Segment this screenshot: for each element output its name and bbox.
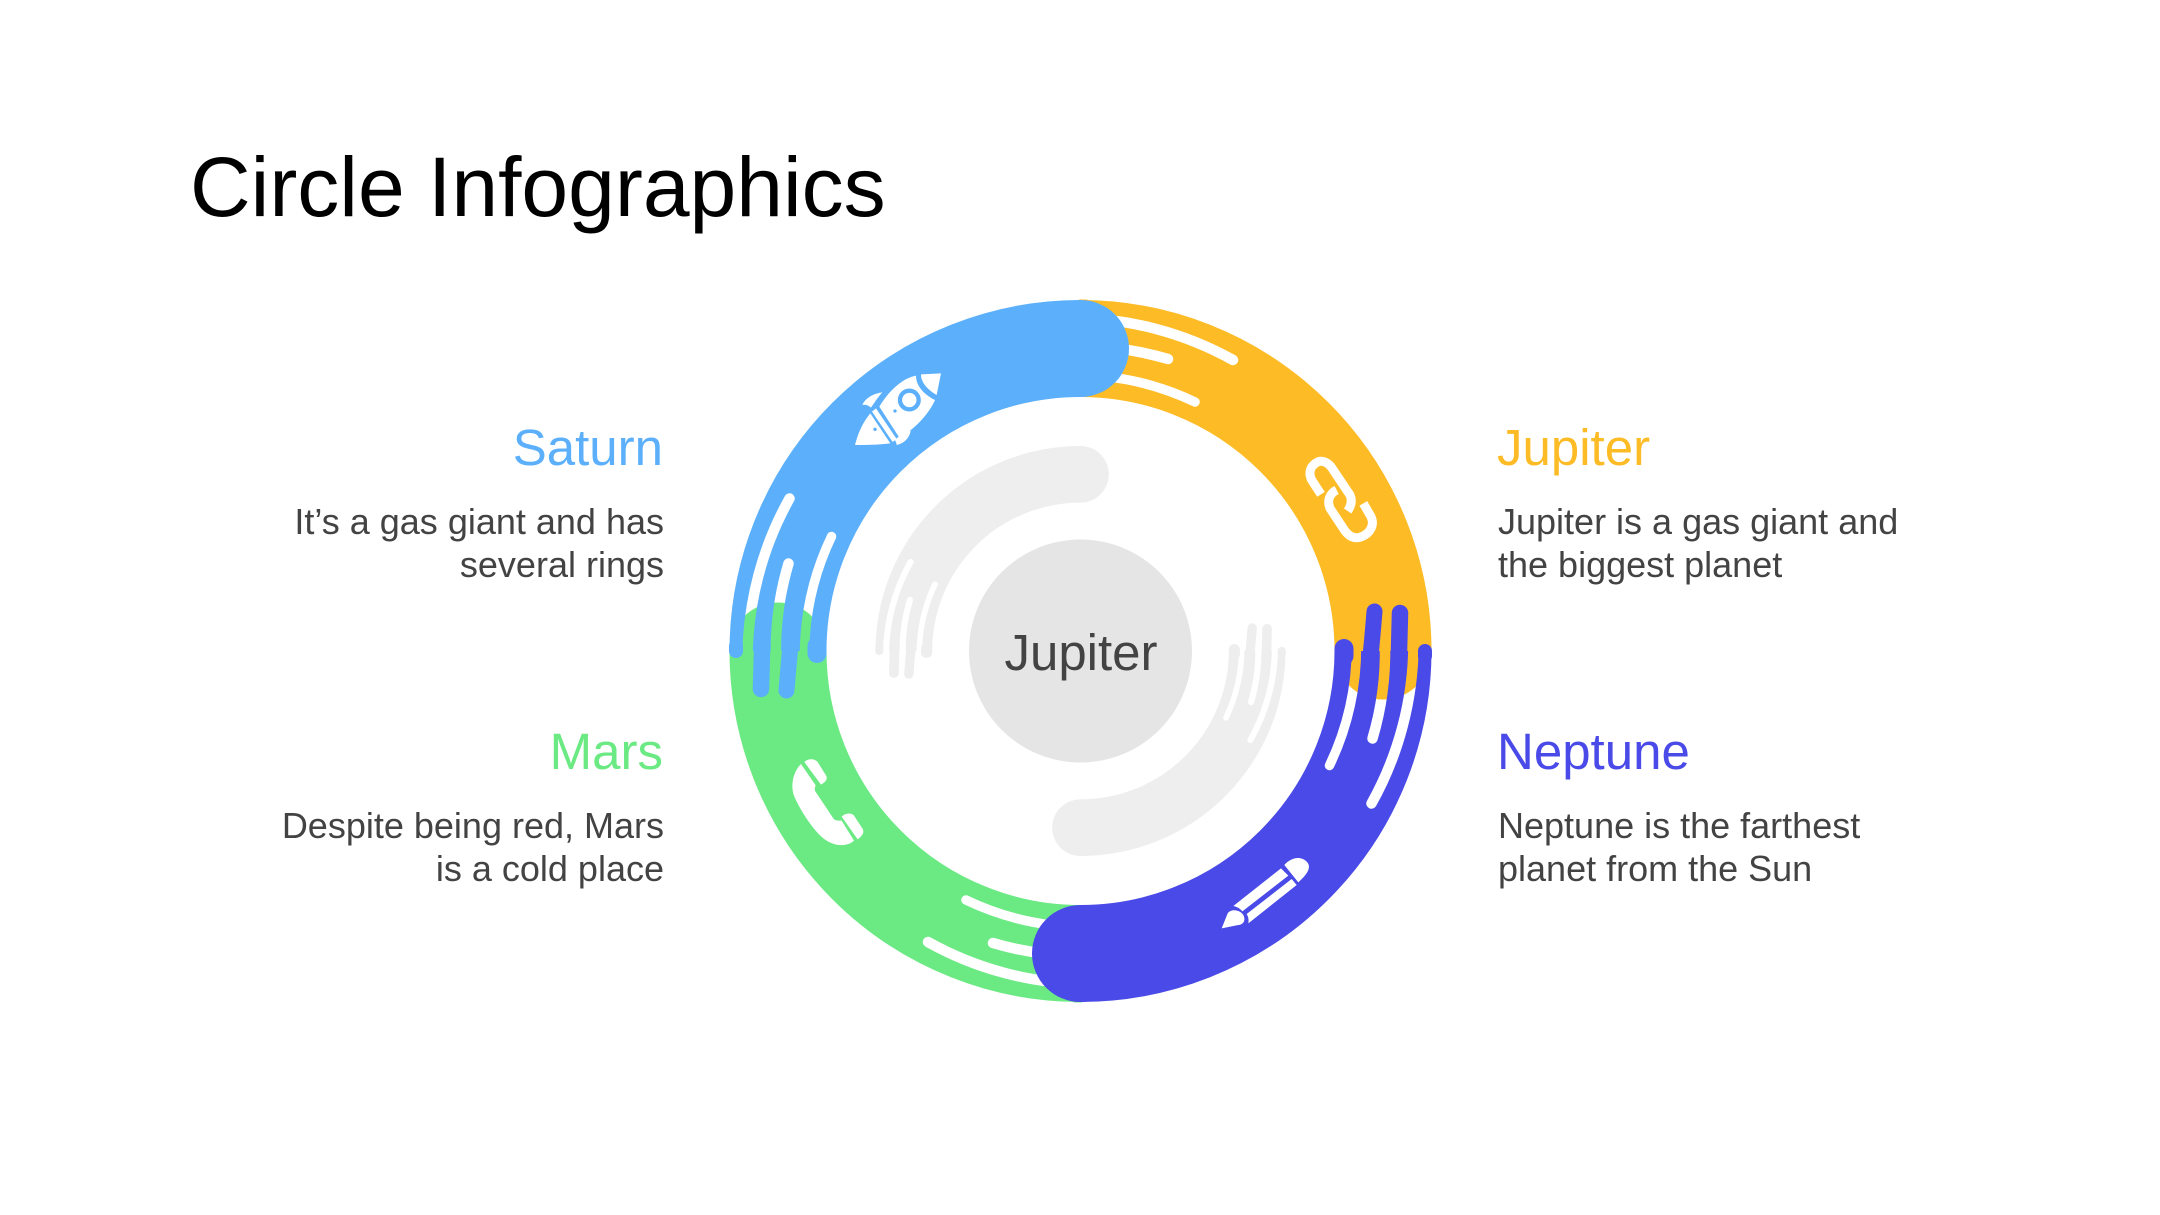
center circle with label: Jupiter <box>1004 624 1158 681</box>
text block: Mars: Mars <box>550 723 663 780</box>
icon: pencil <box>1222 858 1309 928</box>
text block: Mars <box>282 723 664 889</box>
icon: telephone <box>792 759 863 845</box>
text block: Jupiter <box>1497 419 1898 585</box>
ring segment: yellow (Jupiter) <box>1041 306 1383 651</box>
text block: Neptune: Neptune is the farthest <box>1498 805 1860 846</box>
text block: Saturn: several rings <box>460 544 664 585</box>
inner grey swirl <box>879 474 1282 828</box>
text block: Neptune: Neptune <box>1497 723 1690 780</box>
ring segment: purple (Neptune) <box>1080 612 1425 954</box>
text block: Jupiter: Jupiter is a gas giant and <box>1498 501 1898 542</box>
center circle with label <box>969 540 1192 762</box>
text block: Mars: is a cold place <box>436 848 664 889</box>
text block: Mars: Despite being red, Mars <box>282 805 664 846</box>
text block: Jupiter: Jupiter <box>1497 419 1650 476</box>
icon: chain link <box>1310 461 1372 538</box>
circular ring diagram <box>736 306 1425 996</box>
text block: Saturn: Saturn <box>513 419 663 476</box>
text block: Saturn: It’s a gas giant and has <box>294 501 664 542</box>
icon: rocket <box>855 373 941 445</box>
text block: Neptune <box>1497 723 1860 889</box>
text block: Neptune: planet from the Sun <box>1498 848 1812 889</box>
title: Circle Infographics <box>190 140 886 234</box>
ring segment: green (Mars) <box>778 651 1120 996</box>
text block: Jupiter: the biggest planet <box>1498 544 1782 585</box>
text block: Saturn <box>294 419 664 585</box>
ring segment: blue (Saturn) <box>736 348 1081 690</box>
